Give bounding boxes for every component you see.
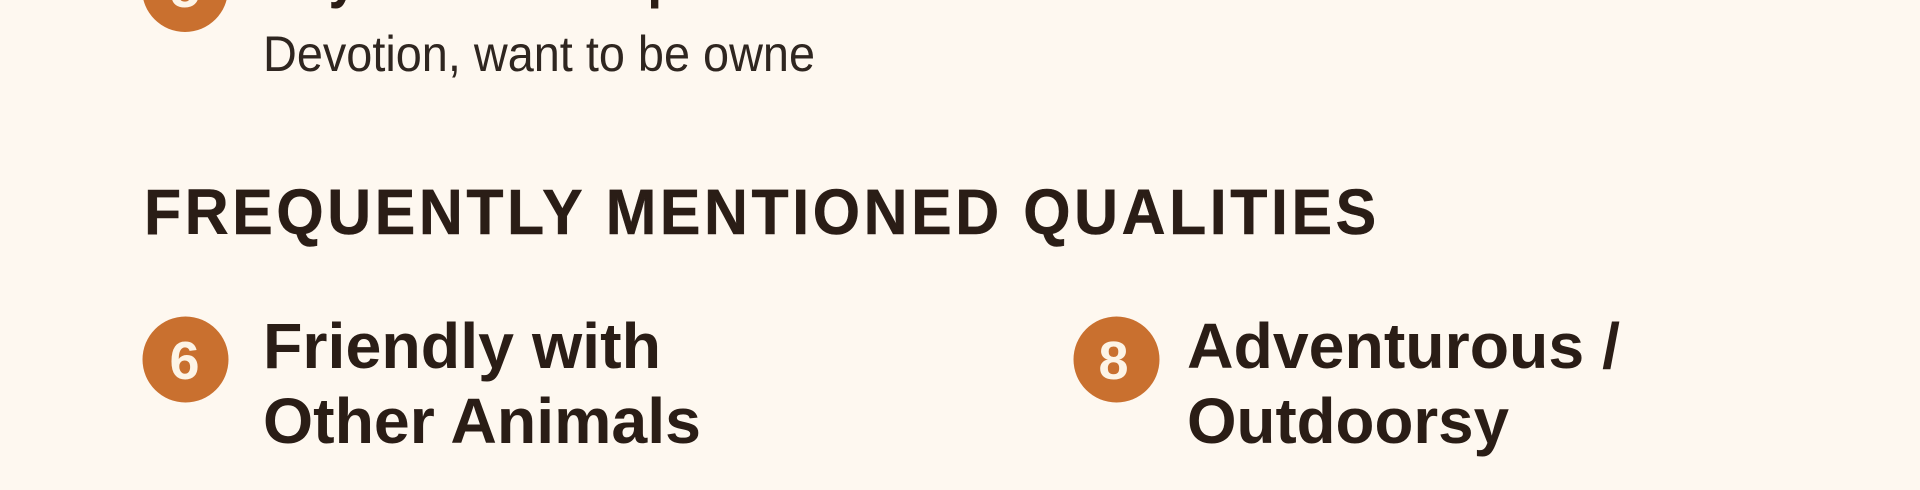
item 6 heading [263, 310, 701, 457]
number badge 6: 6 [169, 331, 200, 391]
list item 5: loyal and companion [142, 0, 823, 82]
item 8 heading: Adventurous / [1187, 310, 1620, 382]
section heading: FREQUENTLY MENTIONED QUALITIES [144, 177, 1376, 248]
number badge 6 [142, 316, 228, 402]
list item 6: friendly with other animals [142, 310, 701, 457]
item 6 heading: Friendly with [263, 310, 661, 382]
number badge 8 [1074, 316, 1160, 402]
number badge 8: 8 [1098, 331, 1129, 391]
item 6 heading: Other Animals [263, 385, 701, 457]
list item 8: adventurous / outdoorsy [1074, 310, 1620, 457]
item 5 description: Devotion, want to be owne [263, 26, 815, 82]
item 8 heading: Outdoorsy [1187, 385, 1509, 457]
number badge 5 [142, 0, 228, 32]
item 8 heading [1187, 310, 1620, 457]
